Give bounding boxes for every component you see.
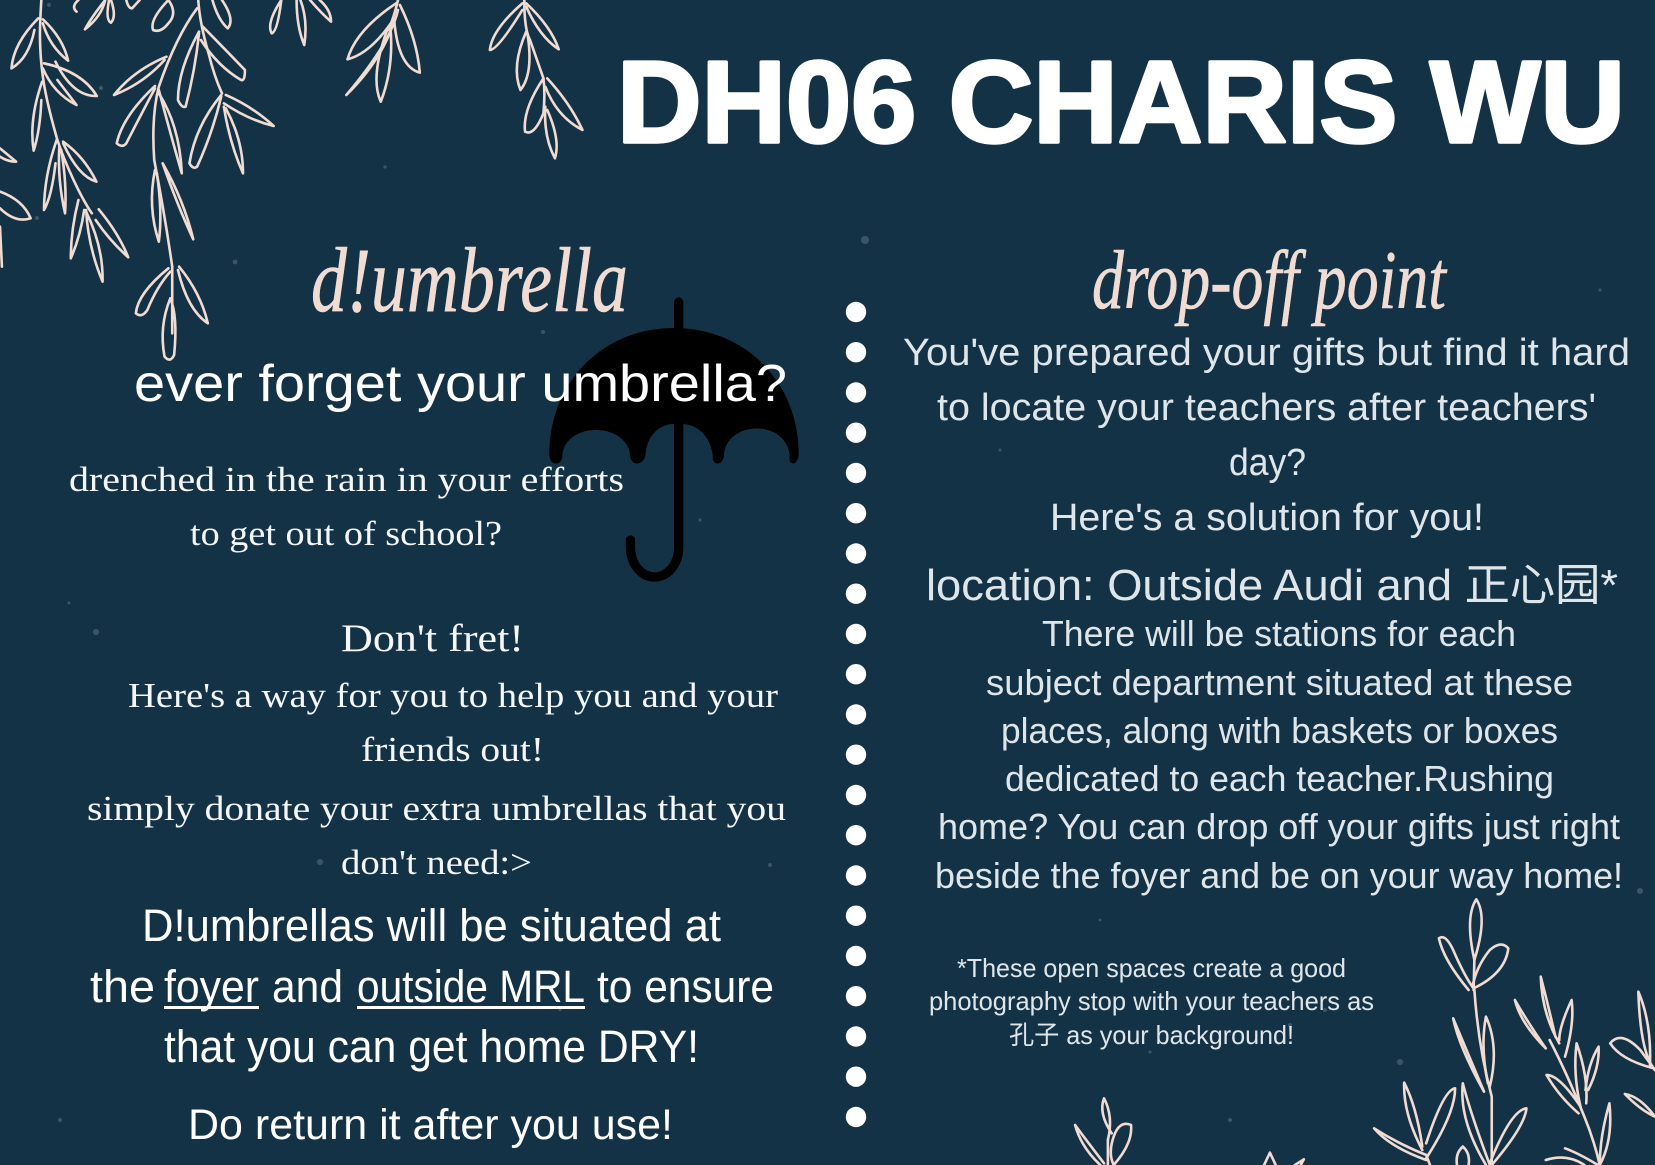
text: footnote: *These open spaces create a good <box>957 953 1346 983</box>
text: do return: Do return it after you use! <box>188 1101 673 1149</box>
text: intro <box>903 332 1630 539</box>
subheading: ever forget: ever forget your umbrella? <box>134 355 787 413</box>
panel: d!umbrella text column <box>69 229 787 1149</box>
text: don't fret: Don't fret! <box>341 617 524 660</box>
foliage: top-left hanging branches <box>0 0 582 360</box>
heading: d!umbrella: d!umbrella <box>311 229 628 331</box>
foliage: bottom-right plants <box>1075 899 1655 1165</box>
dotted divider <box>846 302 866 1127</box>
text: intro: to locate your teachers after teachers' <box>937 387 1596 429</box>
text: stations description: dedicated to each teacher.Rushing <box>1005 758 1554 799</box>
text: location of d!umbrellas: the <box>90 961 155 1012</box>
text: location of d!umbrellas: outside MRL <box>357 961 585 1012</box>
text: simply donate: don't need:> <box>341 843 532 882</box>
text: intro: Here's a solution for you! <box>1050 497 1484 539</box>
icon: black umbrella <box>549 302 799 577</box>
text: stations description: beside the foyer and be on your way home! <box>935 855 1623 896</box>
text: here's a way <box>128 676 778 769</box>
text: stations description: home? You can drop off your gifts just right <box>938 806 1620 847</box>
text: here's a way: friends out! <box>361 730 544 769</box>
text: footnote: 孔子 as your background! <box>1009 1020 1294 1050</box>
title: DH06 CHARIS WU <box>617 37 1625 167</box>
text: location of d!umbrellas: to ensure <box>597 961 774 1012</box>
text: footnote: photography stop with your teachers as <box>929 986 1374 1016</box>
text: location: location: Outside Audi and 正心园* <box>926 561 1618 610</box>
heading: drop-off point: drop-off point <box>1092 234 1448 327</box>
text: intro: You've prepared your gifts but find it hard <box>903 332 1630 374</box>
text: drenched: drenched in the rain in your efforts <box>69 460 624 499</box>
text: stations description: subject department situated at these <box>986 662 1573 703</box>
text: stations description <box>935 613 1623 896</box>
text: intro: day? <box>1229 442 1306 484</box>
text: location of d!umbrellas <box>90 900 774 1072</box>
text: simply donate <box>87 789 786 882</box>
text: stations description: places, along with baskets or boxes <box>1001 710 1558 751</box>
text: simply donate: simply donate your extra umbrellas that you <box>87 789 786 828</box>
text: here's a way: Here's a way for you to help you and your <box>128 676 778 715</box>
text: location of d!umbrellas: and <box>272 961 343 1012</box>
text: location of d!umbrellas: that you can get home DRY! <box>164 1021 699 1072</box>
text: location of d!umbrellas: D!umbrellas will be situated at <box>142 900 721 951</box>
panel: drop-off point text column <box>903 234 1630 1050</box>
text: drenched <box>69 460 624 553</box>
text: location of d!umbrellas: foyer <box>164 961 259 1012</box>
text: drenched: to get out of school? <box>190 514 502 553</box>
text: footnote <box>929 953 1374 1050</box>
text: stations description: There will be stations for each <box>1042 613 1516 654</box>
